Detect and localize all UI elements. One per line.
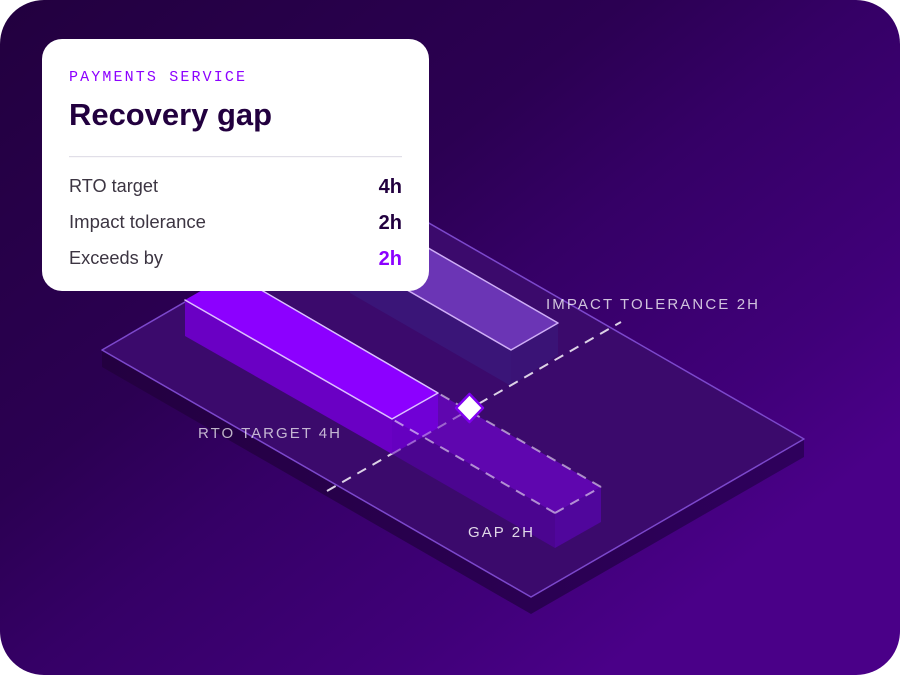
label: gap: GAP 2H xyxy=(468,524,533,541)
row: RTO target: RTO target xyxy=(69,176,158,196)
heading: Recovery gap xyxy=(69,97,272,132)
isometric platform xyxy=(102,192,804,614)
tolerance line over the gap bar xyxy=(392,414,462,454)
row: exceeds by: 2h xyxy=(379,248,402,270)
row: impact tolerance xyxy=(69,212,402,234)
row: RTO target xyxy=(69,176,402,198)
label: impact tolerance: IMPACT TOLERANCE 2H xyxy=(546,296,758,313)
gap dashed outline xyxy=(392,393,601,513)
row: RTO target: 4h xyxy=(379,176,402,198)
row: impact tolerance: 2h xyxy=(379,212,402,234)
row: impact tolerance: Impact tolerance xyxy=(69,212,206,232)
row: exceeds by: Exceeds by xyxy=(69,248,163,268)
RTO target bar xyxy=(185,273,438,454)
gap ghost bar xyxy=(392,393,601,548)
label: RTO target: RTO TARGET 4H xyxy=(198,425,340,442)
row: exceeds by xyxy=(69,248,402,270)
marker diamond xyxy=(456,394,483,422)
tolerance dashed line xyxy=(327,322,621,491)
card: recovery gap xyxy=(42,39,429,291)
eyebrow: PAYMENTS SERVICE xyxy=(69,69,245,86)
impact tolerance bar xyxy=(350,230,558,386)
